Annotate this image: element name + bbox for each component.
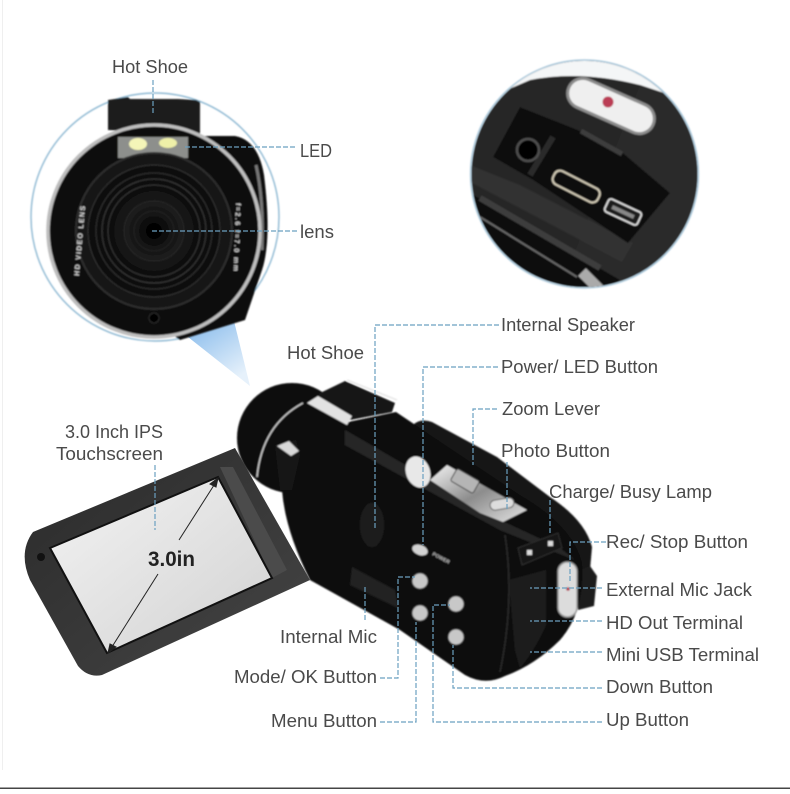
zoom and photo controls [430,465,527,522]
labels [56,57,759,731]
panel: port close-up [465,60,700,300]
display [50,477,272,653]
port door recess [493,107,670,243]
screen size label: 3.0in [148,548,195,571]
front camera dot [37,553,45,561]
top shine band [345,430,575,560]
panel: lens close-up [31,93,279,341]
zoom beam from lens to camera [188,317,250,386]
record dot [602,96,614,108]
up button [448,596,464,612]
lens outer ring [48,125,260,337]
label: lens: lens [300,222,334,242]
label: hot shoe: Hot Shoe [287,343,364,363]
hot shoe plate [307,396,352,425]
right shell shading [590,94,698,282]
record button side [558,562,577,617]
lens text left: HD VIDEO LENS [74,206,87,276]
top white fade [511,60,663,94]
camera body [272,412,583,681]
menu button [412,605,428,621]
port door [509,570,546,668]
lens text right: f=2.6 f=7.0 mm [232,203,241,271]
diagonal measure arrow [108,478,218,653]
leader lines [152,80,606,722]
panel: camcorder main view [237,380,597,681]
bottom rule [0,788,790,789]
rear hinge [275,440,300,490]
label: mini USB terminal: Mini USB Terminal [606,645,759,665]
label: rec stop button: Rec/ Stop Button [606,532,748,552]
door tab [581,131,622,154]
label: hot shoe top: Hot Shoe [112,57,188,77]
speaker grille [360,503,384,547]
down button [448,629,464,645]
label: zoom lever: Zoom Lever [502,399,600,419]
hinge highlight [277,441,299,456]
label: menu button: Menu Button [271,711,377,731]
charge and busy lamps [518,533,562,565]
label: down button: Down Button [606,677,713,697]
page left edge [2,0,3,770]
label: mode OK button: Mode/ OK Button [234,667,377,687]
label: LED: LED [300,141,332,161]
record button [565,76,657,136]
screen bezel [25,448,310,676]
label: charge busy lamp: Charge/ Busy Lamp [549,482,712,502]
screen hinge trim [220,467,287,578]
lower dark band [474,195,620,287]
lens barrel [237,383,347,493]
lens glass rings [76,153,232,309]
zoom pad [401,453,435,491]
label: HD out terminal: HD Out Terminal [606,613,743,633]
strap nub [576,566,597,610]
power label: POWER [431,551,451,566]
label: external mic jack: External Mic Jack [606,580,753,600]
second streak [480,198,600,268]
lower streak [480,217,577,277]
mic grille [350,567,398,608]
mini USB port [604,198,642,226]
silver tip bottom [582,272,600,290]
label: power LED button: Power/ LED Button [501,357,658,377]
label: internal speaker: Internal Speaker [501,315,635,335]
label: internal mic: Internal Mic [280,627,377,647]
audio jack [517,139,539,161]
highlight on body edge [256,165,262,250]
label: up button: Up Button [606,710,689,730]
door seam [500,535,509,672]
power button [411,543,429,557]
hand strap [413,421,592,570]
mode button [412,573,428,589]
hot shoe edge [347,380,397,400]
label: photo button: Photo Button [501,441,610,461]
hot shoe top [318,381,395,420]
LED flash strip [118,137,188,158]
hot shoe block [108,97,200,135]
red dot [566,587,570,591]
lower lip band [471,166,625,240]
label: touchscreen: 3.0 Inch IPS [65,422,163,442]
HDMI port [551,169,602,205]
camera body behind lens [110,136,268,340]
label: touchscreen second line: Touchscreen [56,444,163,464]
barrel rim highlight [257,403,303,477]
panel: flip screen [25,448,310,676]
divider in recess [530,137,553,175]
mic hole [149,313,159,323]
